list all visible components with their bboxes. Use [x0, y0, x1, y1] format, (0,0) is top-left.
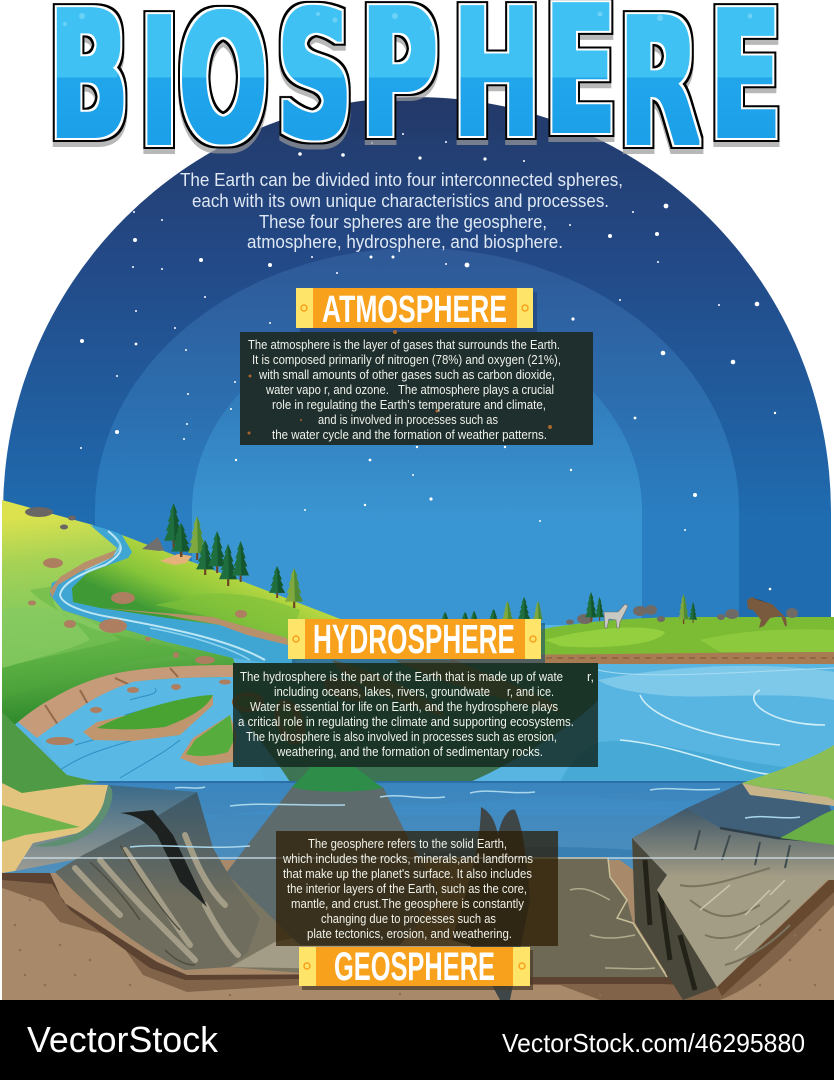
intro text: The Earth can be divided into four interconnected spheres,	[180, 170, 623, 190]
text panel: atmosphere: with small amounts of other gases such as carbon dioxide,	[258, 368, 555, 382]
river	[50, 525, 300, 668]
icon: zebra	[604, 604, 628, 628]
left cliff	[55, 792, 260, 970]
white letter counters behind title	[80, 38, 242, 122]
ground speckle	[14, 899, 821, 996]
text panel: hydrosphere: weathering, and the formation of sedimentary rocks.	[276, 745, 543, 759]
lower river	[37, 677, 265, 782]
stars	[80, 133, 776, 590]
left river bank	[50, 550, 116, 598]
text panel: geosphere: which includes the rocks, minerals,and landforms	[282, 852, 533, 866]
text panel: geosphere: the interior layers of the Earth, such as the core,	[287, 882, 527, 896]
text panel: hydrosphere: Water is essential for life on Earth, and the hydrosphere plays	[250, 700, 558, 714]
rock formations	[15, 767, 834, 1000]
text panel: hydrosphere: including oceans, lakes, rivers, groundwate	[274, 685, 490, 699]
text panel: hydrosphere: The hydrosphere is also involved in processes such as erosion,	[246, 730, 557, 744]
text panel: geosphere: mantle, and crust.The geosphere is constantly	[291, 897, 525, 911]
text panel: atmosphere: water vapo r, and ozone. The atmosphere plays a crucial	[265, 383, 554, 397]
underwater ground	[2, 860, 834, 1000]
footer brand: VectorStock	[27, 1019, 219, 1060]
right cliff light face	[657, 860, 827, 987]
sky dome with concentric atmosphere layers	[3, 97, 831, 640]
icon: lion	[160, 554, 192, 565]
text panel: geosphere: The geosphere refers to the solid Earth,	[308, 837, 507, 851]
upper hill	[55, 535, 343, 660]
icon: boulder	[142, 537, 164, 551]
heading: Hydrosphere: HYDROSPHERE	[313, 616, 515, 662]
text panel: geosphere: plate tectonics, erosion, and weathering.	[307, 927, 512, 941]
text panel: atmosphere: It is composed primarily of nitrogen (78%) and oxygen (21%),	[252, 353, 561, 367]
left coast with sand and green hills	[2, 735, 112, 873]
text panel: atmosphere: role in regulating the Earth's temperature and climate,	[272, 398, 546, 412]
rocks on left hill	[28, 558, 247, 745]
small island	[180, 715, 237, 766]
heading: Geosphere: GEOSPHERE	[334, 945, 495, 989]
text panel: geosphere: changing due to processes such as	[321, 912, 496, 926]
text panel: hydrosphere	[233, 663, 598, 767]
lower river bank	[18, 665, 240, 738]
text panel: hydrosphere: The hydrosphere is the part of the Earth that is made up of wate	[240, 670, 563, 684]
text panel: hydrosphere: r,	[587, 670, 594, 684]
left cliff shallows	[15, 785, 197, 871]
title bubbles	[63, 12, 752, 30]
icon: trees right	[441, 592, 697, 624]
heading: Atmosphere: ATMOSPHERE	[322, 289, 507, 331]
right cliff dark face	[632, 838, 717, 1000]
text panel: atmosphere: the water cycle and the formation of weather patterns.	[272, 428, 547, 442]
text panel: hydrosphere: r, and ice.	[507, 685, 554, 699]
seabed ridge	[226, 857, 667, 977]
left green hills and river	[2, 500, 343, 782]
heading: Geosphere	[299, 945, 533, 990]
text panel: atmosphere: The atmosphere is the layer of gases that surrounds the Earth.	[248, 338, 560, 352]
rocks on right shore	[566, 605, 798, 624]
big island	[83, 695, 213, 741]
intro text: These four spheres are the geosphere,	[259, 212, 547, 232]
right coast with green hills	[742, 745, 834, 845]
heading: Hydrosphere	[288, 616, 545, 663]
intro text: atmosphere, hydrosphere, and biosphere.	[247, 232, 563, 252]
icon: wildebeest	[747, 597, 787, 628]
right cliff top surface	[687, 783, 834, 840]
right cliff upper band	[632, 808, 834, 880]
text panel: hydrosphere: a critical role in regulating the climate and supporting ecosystems.	[238, 715, 574, 729]
upper river bank	[103, 608, 288, 645]
waves	[130, 787, 800, 847]
lower left hill	[2, 500, 240, 735]
icon: trees on hill	[164, 503, 303, 608]
footer bar	[0, 1000, 834, 1080]
intro text: each with its own unique characteristics and processes.	[192, 191, 609, 211]
underwater sea layer	[2, 782, 834, 932]
footer image id: VectorStock.com/46295880	[502, 1028, 805, 1058]
text panel: atmosphere	[240, 330, 593, 445]
lake surface	[2, 625, 834, 783]
intro text	[180, 170, 623, 252]
left bottom hill	[2, 712, 97, 782]
text panel: geosphere: that make up the planet's surface. It also includes	[283, 867, 532, 881]
right shore with grazing animals	[441, 592, 834, 664]
text panel: geosphere	[276, 831, 558, 946]
text panel: atmosphere: and is involved in processes such as	[318, 413, 498, 427]
water surface line	[2, 857, 834, 859]
central mountain	[226, 787, 440, 945]
reflection of hills in the lake	[232, 660, 598, 782]
